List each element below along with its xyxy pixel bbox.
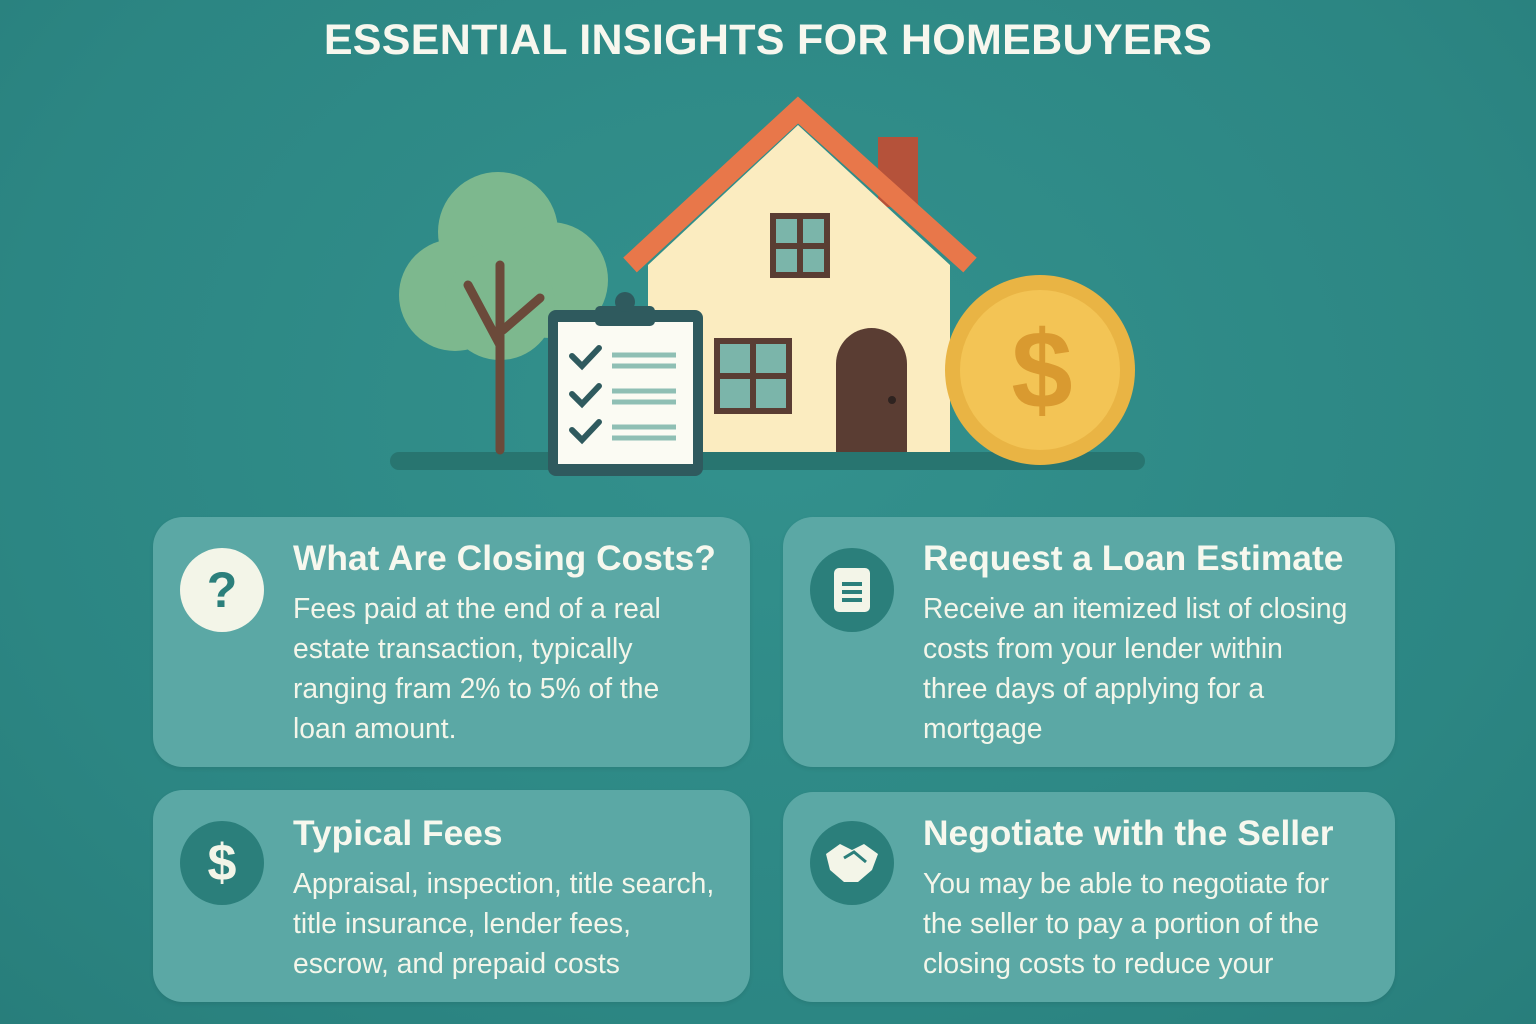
- panel: what are closing costs: [153, 517, 750, 767]
- title: ESSENTIAL INSIGHTS FOR HOMEBUYERS: [324, 16, 1212, 64]
- heading: What Are Closing Costs?: [293, 539, 716, 578]
- icon: dollar: [180, 821, 264, 905]
- text block: costs from your lender within: [923, 633, 1283, 665]
- panel: negotiate with the seller: [783, 792, 1395, 1002]
- text block: mortgage: [923, 713, 1042, 745]
- ground: [390, 452, 1145, 470]
- icon: coin: [945, 275, 1135, 465]
- icon: handshake: [810, 821, 894, 905]
- text block: ranging fram 2% to 5% of the: [293, 673, 659, 705]
- panel: request a loan estimate: [783, 517, 1395, 767]
- icon: question mark: ?: [207, 562, 237, 618]
- icon: dollar: $: [208, 834, 236, 892]
- text block: the seller to pay a portion of the: [923, 908, 1319, 940]
- text block: estate transaction, typically: [293, 633, 632, 665]
- text block: You may be able to negotiate for: [923, 868, 1329, 900]
- text block: title insurance, lender fees,: [293, 908, 631, 940]
- text block: closing costs to reduce your: [923, 948, 1273, 980]
- text block: loan amount.: [293, 713, 456, 745]
- icon: coin: $: [1011, 309, 1073, 432]
- panel: typical fees: [153, 790, 750, 1002]
- icon: house: [630, 110, 970, 452]
- text block: escrow, and prepaid costs: [293, 948, 620, 980]
- icon: tree: [399, 172, 608, 450]
- heading: Typical Fees: [293, 814, 503, 853]
- icon: clipboard: [548, 292, 703, 476]
- text block: [293, 868, 714, 980]
- text block: [293, 593, 661, 745]
- text block: Fees paid at the end of a real: [293, 593, 661, 625]
- text block: Receive an itemized list of closing: [923, 593, 1347, 625]
- heading: Request a Loan Estimate: [923, 539, 1343, 578]
- text block: [923, 593, 1347, 745]
- text block: Appraisal, inspection, title search,: [293, 868, 714, 900]
- illustration: house scene: [390, 96, 1145, 476]
- text block: three days of applying for a: [923, 673, 1264, 705]
- icon: question mark: [180, 548, 264, 632]
- icon: document: [810, 548, 894, 632]
- text block: [923, 868, 1329, 980]
- heading: Negotiate with the Seller: [923, 814, 1334, 853]
